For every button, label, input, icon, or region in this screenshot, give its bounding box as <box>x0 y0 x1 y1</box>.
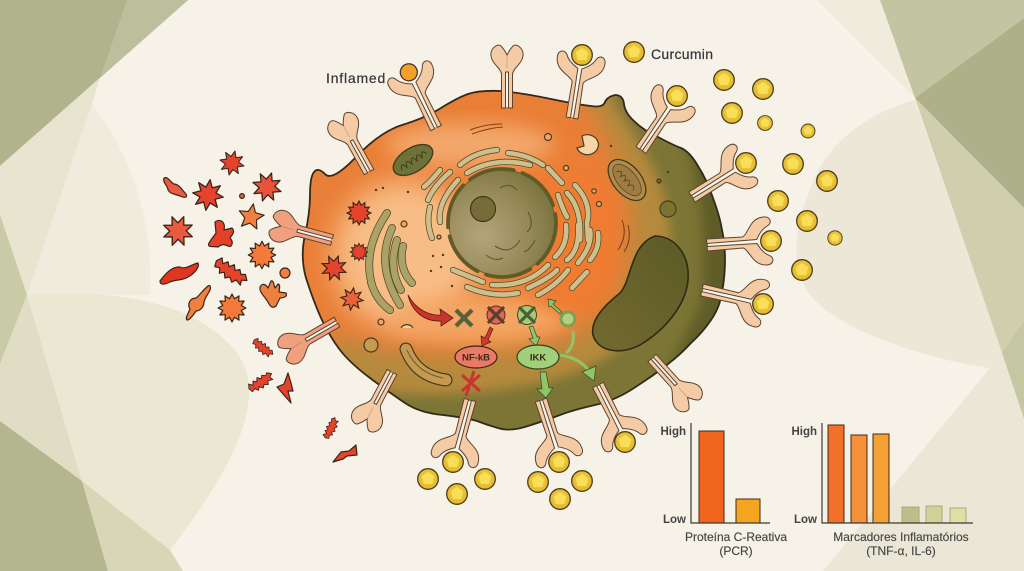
bars after curcumin <box>902 506 966 523</box>
red blocked cross <box>462 371 480 396</box>
receptor: upper left, empty <box>324 109 383 180</box>
green arrow down from IKK <box>537 372 553 398</box>
caption: Proteína C-Reativa <box>685 530 787 544</box>
receptor: inflamed, with orange ligand <box>383 54 458 139</box>
NF-kB node: NF-kB <box>462 352 490 364</box>
green ring node <box>561 312 575 326</box>
chart: C-reactive protein <box>660 423 787 558</box>
caption: (TNF-α, IL-6) <box>866 544 936 558</box>
caption: (PCR) <box>719 544 753 558</box>
chart: inflammatory markers <box>791 423 973 558</box>
receptor: top, empty <box>491 45 523 108</box>
receptors bound to curcumin <box>430 50 773 469</box>
receptor: bottom left, empty <box>348 364 406 435</box>
caption: Marcadores Inflamatórios <box>833 530 969 544</box>
bars before curcumin <box>828 425 889 523</box>
inhibited green node <box>518 306 536 324</box>
axis label high: High <box>660 426 686 438</box>
inhibited red node <box>487 306 505 324</box>
axis label high: High <box>791 426 817 438</box>
vacuole <box>593 236 688 351</box>
mitochondrion: bottom <box>406 349 446 380</box>
green arrow up-left <box>548 299 562 314</box>
bar: low <box>736 499 760 523</box>
endoplasmic reticulum bands <box>369 150 598 310</box>
receptor: left pink upper <box>267 208 336 256</box>
curcumin molecules bound to receptors <box>443 45 781 472</box>
mitochondrion: upper left <box>388 138 438 182</box>
axis label low: Low <box>794 514 817 526</box>
green curved arrow to lower right <box>560 331 590 372</box>
free curcumin molecules <box>418 70 842 509</box>
axes <box>691 423 770 523</box>
IKK node: IKK <box>530 352 546 364</box>
small vesicles and granules <box>364 124 676 352</box>
cell body <box>302 90 726 430</box>
axis label low: Low <box>663 514 686 526</box>
label: inflamed: Inflamed <box>326 70 386 86</box>
receptor: bottom right, empty <box>640 347 706 415</box>
nucleus <box>448 169 556 277</box>
green arrow down to IKK <box>529 326 540 346</box>
cytokine cluster outside the cell <box>158 148 357 462</box>
red arrow into blocked node <box>408 295 453 326</box>
mitochondrion: upper right <box>601 153 653 207</box>
green cross <box>456 310 472 326</box>
green arrowhead <box>582 366 596 381</box>
signalling pathway <box>408 295 596 398</box>
bar: high <box>699 431 724 523</box>
receptor: left pink lower <box>275 308 345 367</box>
legend: curcumin <box>624 42 713 62</box>
legend: curcumin: Curcumin <box>651 46 713 62</box>
axes <box>822 423 973 523</box>
red arrow down to NF-kB <box>481 327 493 346</box>
NF-kB node <box>455 346 497 368</box>
inflammatory signals inside the cell <box>318 201 371 312</box>
nucleolus <box>470 196 496 222</box>
IKK node <box>517 345 559 369</box>
